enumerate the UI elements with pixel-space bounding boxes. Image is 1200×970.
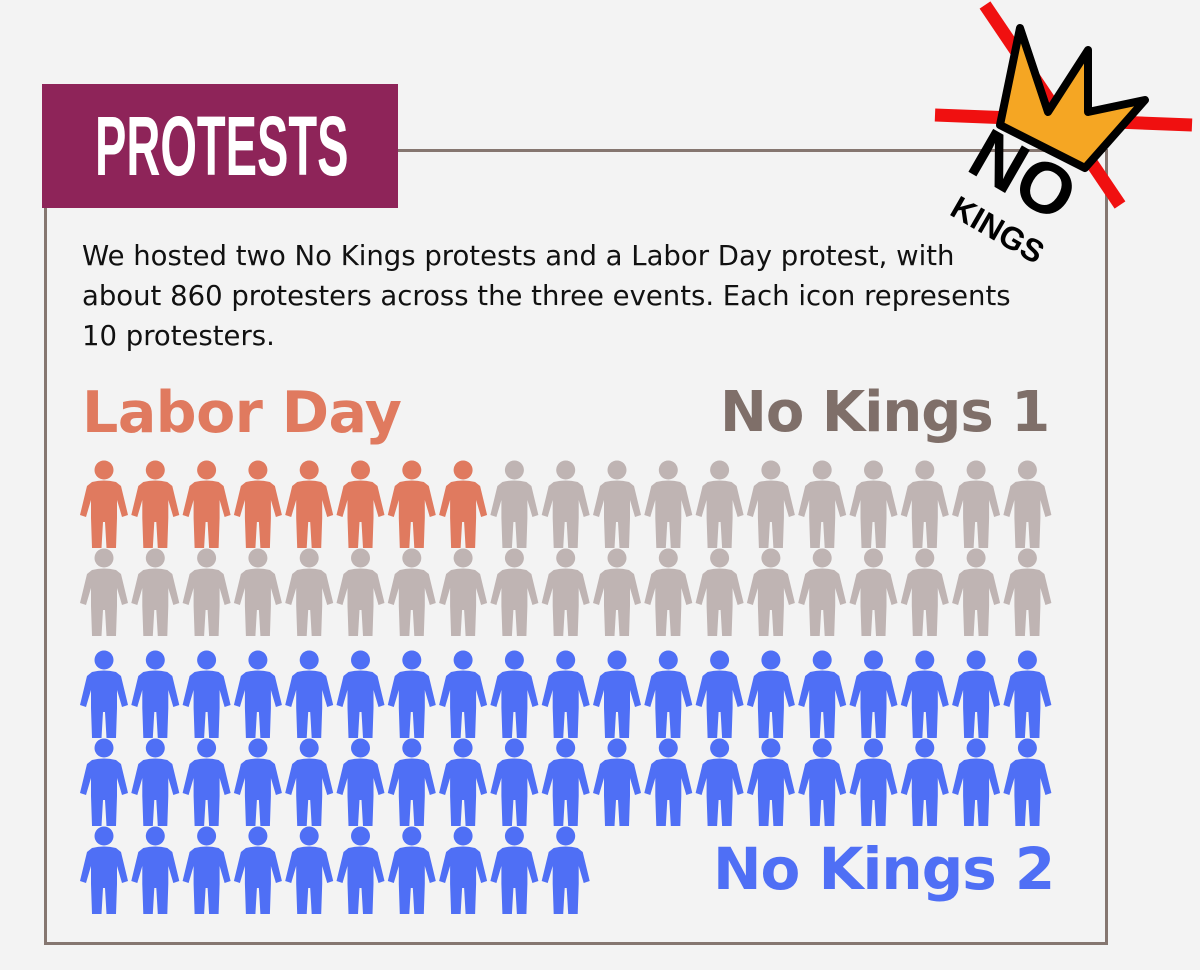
red X xyxy=(935,5,1192,205)
text block: description: about 860 protesters across the three events. Each icon represents xyxy=(82,280,1011,312)
row 2: no kings 1 xyxy=(80,548,1051,636)
text block: description xyxy=(82,240,1011,352)
title box xyxy=(42,84,398,208)
text block: description: We hosted two No Kings protests and a Labor Day protest, with xyxy=(82,240,954,272)
heading: No Kings 1: No Kings 1 xyxy=(720,380,1049,445)
title box: PROTESTS xyxy=(95,99,349,193)
rows 3-5: no kings 2 xyxy=(80,650,1051,914)
icon: No Kings logo xyxy=(934,1,1192,271)
logo text: NO xyxy=(956,114,1090,237)
heading: No Kings 2: No Kings 2 xyxy=(713,835,1054,903)
logo text: KINGS xyxy=(945,189,1051,271)
crown xyxy=(1000,28,1145,168)
text block: description: 10 protesters. xyxy=(82,320,275,352)
heading: Labor Day: Labor Day xyxy=(82,380,401,446)
row 1: labor day + no kings 1 xyxy=(80,460,1051,548)
panel: main frame xyxy=(44,149,1108,945)
